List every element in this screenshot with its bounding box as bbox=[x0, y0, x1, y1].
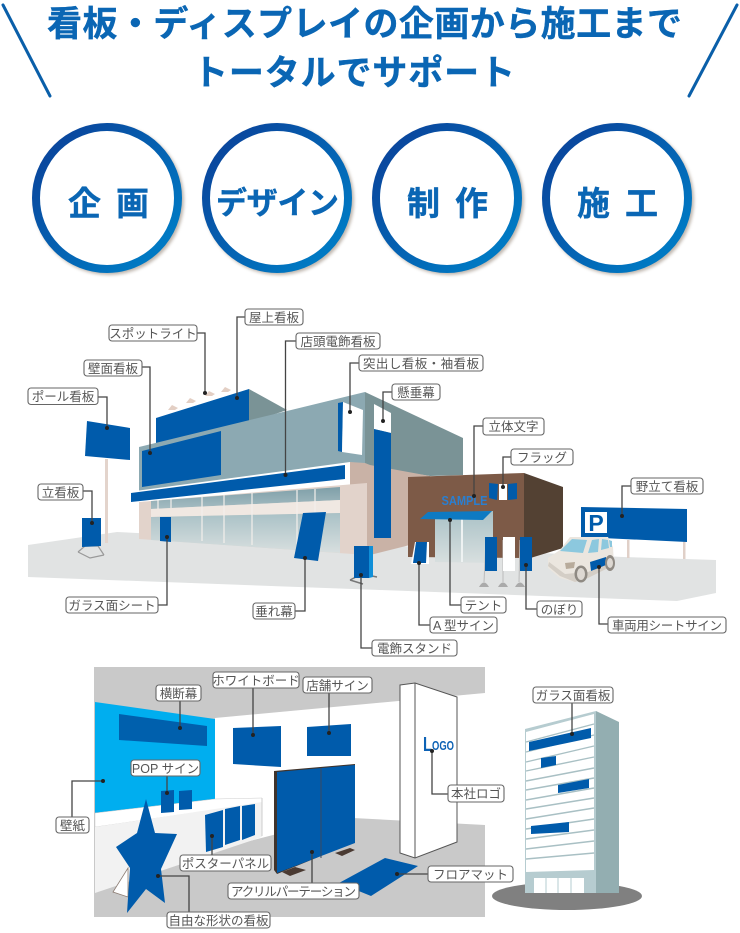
LOGO bbox=[423, 734, 454, 756]
counter front bbox=[95, 802, 262, 893]
protruding sign edge bbox=[338, 402, 343, 452]
label: 電飾スタンド: 電飾スタンド bbox=[377, 642, 452, 656]
glass sheet bbox=[160, 517, 171, 542]
header bracket: left slash bbox=[3, 5, 50, 96]
rooftop sign bbox=[156, 389, 249, 448]
partition frame bbox=[274, 764, 355, 874]
rooftop side bbox=[249, 389, 287, 423]
title: トータルでサポート bbox=[193, 54, 515, 93]
label: フロアマット: フロアマット bbox=[433, 868, 508, 882]
shop front bbox=[408, 473, 524, 558]
label: 本社ロゴ bbox=[430, 749, 504, 802]
process circle: 企画: 企画 bbox=[68, 185, 149, 222]
back wall bbox=[215, 693, 485, 850]
LOGO: L bbox=[423, 734, 432, 756]
label: 懸垂幕 bbox=[381, 384, 440, 423]
label: 立体文字 bbox=[472, 418, 544, 498]
label: 立看板: 立看板 bbox=[42, 486, 80, 500]
label: 横断幕 bbox=[156, 685, 201, 730]
upper wall bbox=[139, 392, 365, 492]
lower wall bbox=[139, 483, 367, 555]
car bbox=[548, 537, 615, 582]
parking P bbox=[585, 510, 607, 536]
acrylic partition bbox=[277, 765, 355, 873]
label: ホワイトボード bbox=[212, 672, 300, 737]
banner flags bbox=[479, 537, 532, 587]
floors bbox=[526, 714, 594, 872]
window band bbox=[151, 500, 340, 517]
label: 横断幕: 横断幕 bbox=[160, 687, 198, 701]
wall sign bbox=[142, 431, 221, 487]
label: 車両用シートサイン bbox=[597, 565, 726, 633]
label: ガラス面看板 bbox=[533, 687, 613, 736]
illustration: office building bbox=[492, 711, 642, 910]
label: スポットライト bbox=[109, 325, 207, 395]
light stand bbox=[354, 546, 369, 578]
star back stand bbox=[113, 868, 128, 897]
label: 壁面看板 bbox=[84, 360, 152, 455]
hanging banner bbox=[374, 429, 391, 538]
star sign bbox=[116, 799, 177, 913]
label: 垂れ幕: 垂れ幕 bbox=[255, 605, 293, 619]
glass signs bbox=[529, 728, 591, 834]
label: テント bbox=[448, 518, 506, 613]
standing board frame bbox=[78, 546, 104, 558]
label: 店頭電飾看板 bbox=[284, 333, 380, 477]
LOGO: OGO bbox=[432, 738, 454, 753]
pole sign post bbox=[105, 459, 108, 543]
label: 屋上看板: 屋上看板 bbox=[249, 311, 299, 325]
label: A型サイン: A 型サイン bbox=[433, 619, 494, 633]
ground bbox=[28, 532, 716, 601]
POP signs bbox=[161, 790, 192, 813]
label: 懸垂幕: 懸垂幕 bbox=[397, 386, 435, 400]
label: 立体文字: 立体文字 bbox=[488, 420, 539, 434]
process circle: 施工 bbox=[544, 125, 694, 275]
illustration: storefront scene bbox=[28, 387, 716, 601]
label: 店舗サイン bbox=[303, 677, 372, 735]
label: ガラス面シート: ガラス面シート bbox=[68, 599, 156, 613]
title bbox=[47, 4, 682, 93]
label: フラッグ: フラッグ bbox=[517, 451, 567, 465]
label: 自由な形状の看板 bbox=[156, 874, 270, 928]
lower right wall bbox=[350, 462, 430, 555]
blue wallpaper bbox=[95, 702, 215, 813]
label: ホワイトボード: ホワイトボード bbox=[212, 674, 300, 688]
process circle: 制作: 制作 bbox=[407, 185, 488, 222]
label: ポール看板 bbox=[28, 388, 109, 430]
label: テント: テント bbox=[465, 599, 502, 613]
label: ガラス面看板: ガラス面看板 bbox=[536, 689, 611, 703]
label: POPサイン bbox=[131, 760, 200, 795]
light stand side bbox=[369, 546, 373, 578]
label: 壁紙: 壁紙 bbox=[60, 819, 85, 833]
banner bbox=[119, 714, 207, 746]
label: 野立て看板: 野立て看板 bbox=[636, 480, 699, 494]
front bbox=[525, 711, 596, 893]
label: 店舗サイン: 店舗サイン bbox=[306, 679, 369, 693]
hanging banner top bbox=[374, 404, 391, 433]
store sign bbox=[131, 465, 345, 502]
standing board bbox=[82, 518, 101, 547]
billboard bbox=[581, 507, 687, 542]
whiteboard bbox=[233, 726, 281, 767]
window dividers bbox=[158, 489, 315, 551]
label: アクリルパーテーション bbox=[228, 850, 359, 899]
label: 野立て看板 bbox=[620, 478, 703, 518]
3D letters: SAMPLE bbox=[442, 494, 488, 508]
pillar bbox=[400, 683, 457, 858]
drop curtain bbox=[294, 512, 326, 561]
illustration: interior scene bbox=[94, 667, 485, 917]
shop side bbox=[524, 473, 563, 560]
label: 突出し看板・袖看板: 突出し看板・袖看板 bbox=[363, 357, 479, 371]
label: のぼり bbox=[524, 563, 582, 617]
pole sign bbox=[85, 421, 130, 460]
protruding sign bbox=[342, 402, 363, 455]
flags bbox=[489, 483, 517, 500]
label: 屋上看板 bbox=[235, 309, 303, 400]
label: 壁面看板: 壁面看板 bbox=[88, 362, 138, 376]
label: フロアマット bbox=[395, 866, 513, 882]
label: ガラス面シート bbox=[66, 535, 169, 613]
label: 立看板 bbox=[38, 484, 94, 525]
light stand base bbox=[350, 576, 377, 584]
label: A型サイン bbox=[417, 561, 497, 633]
label: 車両用シートサイン: 車両用シートサイン bbox=[612, 619, 722, 633]
A-frame sign bbox=[411, 542, 429, 564]
label: フラッグ bbox=[501, 449, 573, 489]
icon: spotlights bbox=[168, 387, 231, 410]
label: ポスターパネル bbox=[180, 834, 271, 871]
process circle: 施工: 施工 bbox=[577, 185, 658, 222]
parking P: P bbox=[588, 510, 604, 536]
label: のぼり: のぼり bbox=[541, 603, 578, 617]
label: POPサイン: POP サイン bbox=[132, 762, 199, 776]
partition feet bbox=[282, 848, 355, 876]
lower windows bbox=[151, 513, 340, 553]
label: アクリルパーテーション: アクリルパーテーション bbox=[231, 885, 356, 899]
upper wall side bbox=[365, 392, 463, 476]
entrance bbox=[534, 878, 584, 893]
store sign bbox=[307, 724, 351, 756]
label: 本社ロゴ: 本社ロゴ bbox=[451, 786, 501, 801]
floor mat bbox=[339, 858, 418, 896]
entrance bbox=[435, 511, 493, 563]
label: 自由な形状の看板: 自由な形状の看板 bbox=[168, 914, 269, 928]
title: 看板・ディスプレイの企画から施工まで bbox=[47, 4, 682, 44]
label: 店頭電飾看板: 店頭電飾看板 bbox=[300, 335, 376, 349]
side bbox=[596, 711, 619, 893]
label: ポスターパネル: ポスターパネル bbox=[182, 857, 269, 871]
counter top bbox=[95, 798, 262, 827]
upper windows bbox=[151, 487, 340, 509]
room background bbox=[94, 667, 485, 917]
tent bbox=[420, 511, 492, 520]
floor lines bbox=[526, 724, 594, 859]
label: 壁紙 bbox=[56, 779, 105, 833]
label: 電飾スタンド bbox=[359, 573, 457, 656]
label: スポットライト: スポットライト bbox=[109, 327, 197, 341]
billboard posts bbox=[627, 540, 630, 558]
label: 突出し看板・袖看板 bbox=[348, 355, 483, 414]
poster panels bbox=[205, 804, 255, 852]
label: 垂れ幕 bbox=[253, 556, 307, 619]
process circle: 制作 bbox=[374, 125, 524, 275]
awning sign frame bbox=[128, 462, 350, 503]
process circle: デザイン: デザイン bbox=[216, 186, 339, 221]
label: ポール看板: ポール看板 bbox=[32, 390, 95, 404]
counter right edge bbox=[261, 798, 263, 836]
shadow bbox=[492, 882, 642, 910]
header bracket: right slash bbox=[689, 5, 737, 96]
process circle: 企画 bbox=[34, 125, 184, 275]
process circle: デザイン bbox=[204, 125, 354, 275]
